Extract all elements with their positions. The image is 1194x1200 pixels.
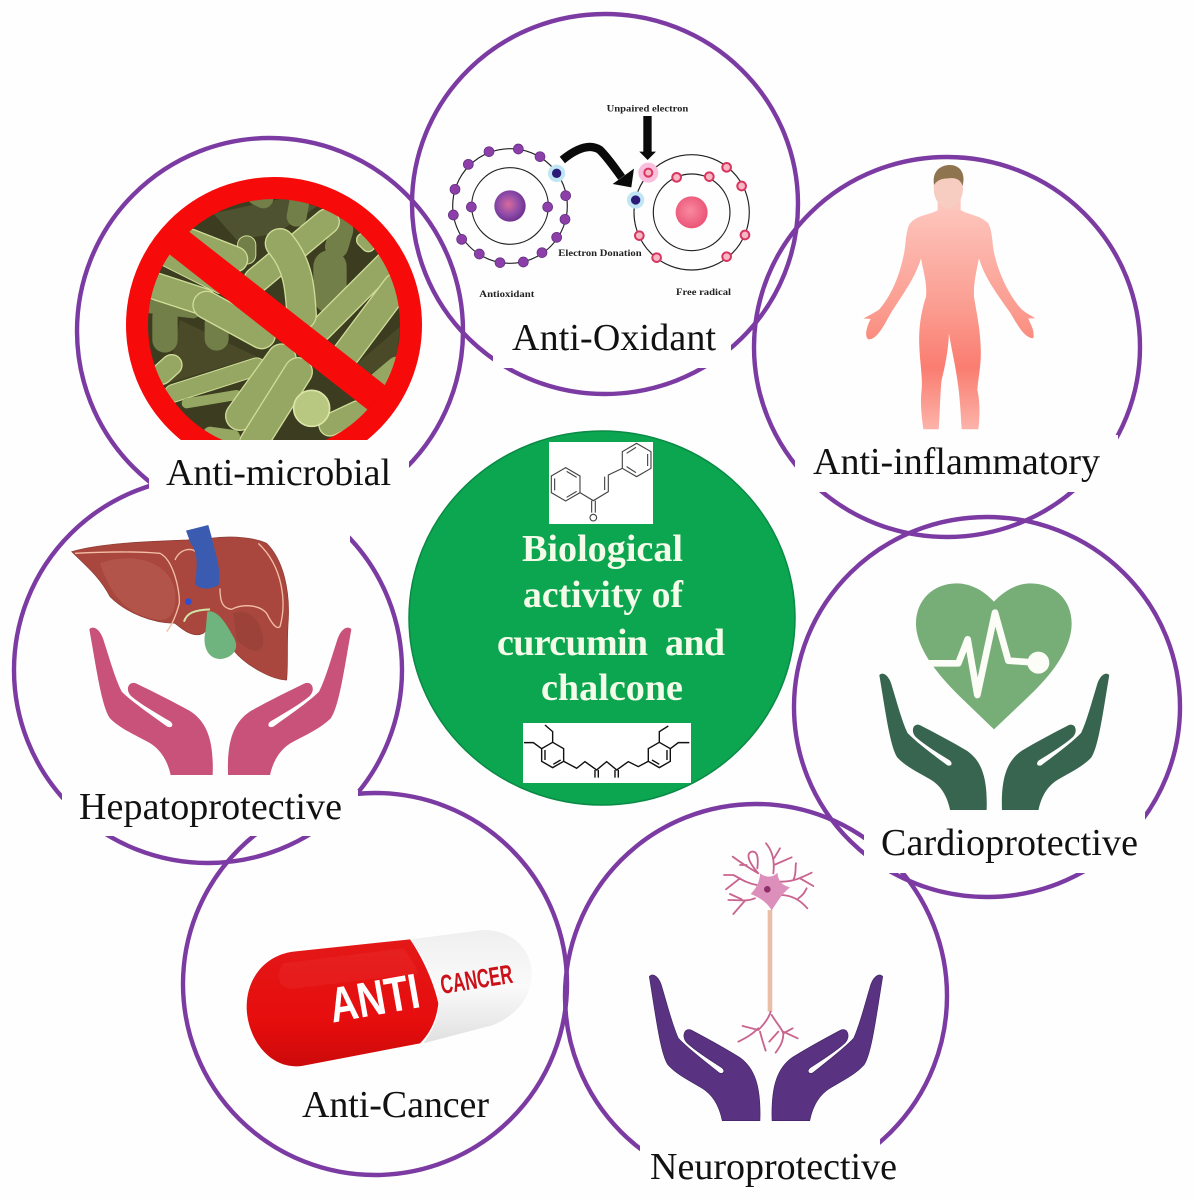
- tiny labels: Electron Donation: [558, 248, 642, 258]
- icon: no bacteria: [137, 188, 411, 462]
- icon: capsule: [247, 930, 532, 1066]
- chalcone structure: [549, 442, 653, 524]
- panel: cardioprotective: [879, 583, 1138, 864]
- panel: neuroprotective: [649, 843, 897, 1188]
- tiny labels: Free radical: [676, 287, 732, 297]
- panel: hepatoprotective: [72, 525, 351, 828]
- panel: anti-cancer: [247, 930, 532, 1126]
- arrow: unpaired electron: [639, 116, 656, 160]
- label: Anti-inflammatory: [813, 441, 1100, 483]
- icon: liver: [72, 525, 289, 680]
- curcumin structure: [523, 723, 691, 783]
- ring: neuroprotective: [565, 804, 947, 1188]
- icon: capsule: ANTI: [325, 964, 424, 1033]
- label: Anti-microbial: [166, 452, 391, 494]
- label: Anti-Cancer: [302, 1084, 489, 1126]
- tiny labels: [479, 103, 732, 299]
- title: Biological: [522, 528, 683, 570]
- arrow: electron transfer: [562, 147, 634, 187]
- ring: anti-oxidant: [412, 14, 798, 394]
- ring: cardioprotective: [794, 517, 1180, 897]
- icon: human body: [863, 165, 1036, 429]
- electron transfer diagram: [448, 103, 749, 299]
- bacteria rods: [147, 195, 400, 443]
- panel: central green circle: [409, 431, 795, 805]
- green disc: [409, 431, 795, 805]
- title: [497, 528, 725, 709]
- ring: anti-inflammatory: [754, 157, 1140, 537]
- tiny labels: Unpaired electron: [607, 103, 688, 113]
- prohibition sign: [137, 188, 411, 462]
- icon: heart with ECG: [916, 583, 1072, 729]
- panel: anti-oxidant: [448, 103, 749, 359]
- ring: anti-microbial: [77, 138, 463, 524]
- label: Hepatoprotective: [79, 786, 342, 828]
- icon: hands: [649, 975, 883, 1121]
- ring: anti-cancer: [183, 793, 567, 1175]
- panel: anti-inflammatory: [813, 165, 1100, 483]
- title: curcumin and: [497, 622, 725, 664]
- label: Anti-Oxidant: [512, 317, 716, 359]
- title: activity of: [523, 574, 684, 616]
- ring: hepatoprotective: [14, 477, 402, 863]
- icon: hands: [879, 674, 1109, 810]
- title: chalcone: [541, 667, 683, 709]
- icon: free radical atom: [627, 155, 749, 270]
- tiny labels: Antioxidant: [479, 289, 534, 299]
- icon: antioxidant atom: [448, 144, 571, 268]
- icon: hands: [89, 628, 351, 775]
- label: Cardioprotective: [881, 822, 1138, 864]
- icon: capsule: CANCER: [438, 959, 515, 1000]
- icon: neuron: [724, 843, 813, 1053]
- label: Neuroprotective: [650, 1146, 897, 1188]
- panel: anti-microbial: [137, 188, 411, 494]
